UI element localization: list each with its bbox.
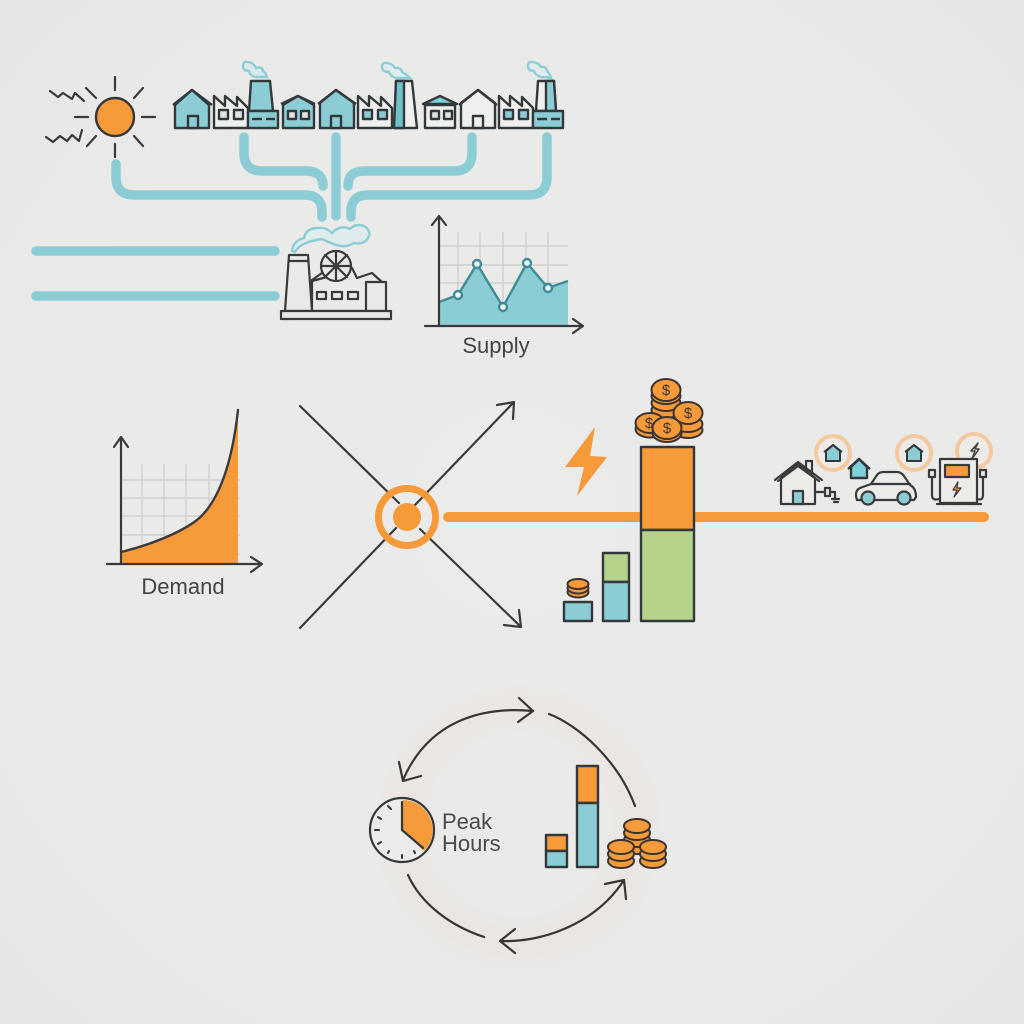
label: Peak Hours: Peak: [442, 809, 493, 834]
demand chart: [107, 410, 262, 572]
icon: peak hours coins: [608, 819, 666, 868]
tall bar: [641, 447, 694, 621]
icon: small house 2: [281, 96, 315, 128]
icon: teal house 1: [173, 90, 212, 128]
tall bar: [577, 766, 598, 867]
icon: factory 2: [358, 96, 392, 128]
icon: cooling tower 3: [533, 81, 563, 128]
equilibrium target marker: [378, 488, 436, 546]
coin stack right: $: [684, 405, 693, 422]
label: Peak Hours: Hours: [442, 831, 501, 856]
medium bar: [603, 553, 629, 621]
icon: large coin pile: [636, 379, 702, 442]
peak hours bars: [546, 766, 598, 867]
icon: factory 3: [499, 96, 533, 128]
icon: smoke 3: [528, 62, 551, 78]
icon row: houses and factories: [173, 62, 563, 128]
rising stacked bars: [564, 447, 694, 621]
icon: house with plug: [775, 461, 839, 504]
coin stack top: $: [662, 382, 671, 399]
icon: small house 4: [423, 96, 457, 128]
icon: EV charger: [929, 459, 986, 504]
peak hours cycle glow: [401, 708, 637, 944]
icon: sun with heat waves: [46, 77, 155, 157]
icon: car: [856, 472, 916, 504]
icon: plant smoke cloud: [292, 225, 369, 252]
supply chart: [425, 216, 583, 333]
crossing arrows: [300, 402, 521, 628]
small bar: [564, 602, 592, 621]
plant building: [281, 255, 391, 319]
coin stack top: [624, 819, 650, 854]
label: Supply: Supply: [462, 333, 530, 358]
icon: white house 5: [459, 90, 497, 128]
icon: lightning bolt: [565, 427, 607, 496]
coin stack front: $: [663, 420, 672, 437]
consumers: home, car, charger: [775, 434, 991, 504]
icon: small coin stack: [568, 579, 588, 598]
horizontal supply lines: [36, 251, 275, 296]
icon: factory 1: [214, 96, 248, 128]
icon: teal house 3: [318, 90, 356, 128]
icon: peak hours clock: [370, 798, 434, 862]
icon: turbine wheel: [321, 251, 351, 281]
icon: smoke 2: [382, 63, 410, 78]
supply pipes converging on plant: [116, 137, 547, 217]
icon: small teal house: [848, 459, 870, 478]
coin stack left: [608, 840, 634, 868]
icon: cooling tower 1: [248, 81, 278, 128]
short bar: [546, 835, 567, 867]
coin stack right: [640, 840, 666, 868]
coin stack left: $: [645, 415, 654, 432]
icon: power plant: [281, 225, 391, 319]
cycle arrows: [399, 698, 635, 953]
icon: chimney 2: [394, 81, 417, 128]
icon: ring home 2: [897, 436, 931, 470]
orange price line: [448, 512, 984, 522]
icon: ring bolt: [957, 434, 991, 468]
label: Demand: Demand: [141, 574, 225, 599]
icon: smoke 1: [243, 62, 267, 77]
icon: ring home: [816, 436, 850, 470]
